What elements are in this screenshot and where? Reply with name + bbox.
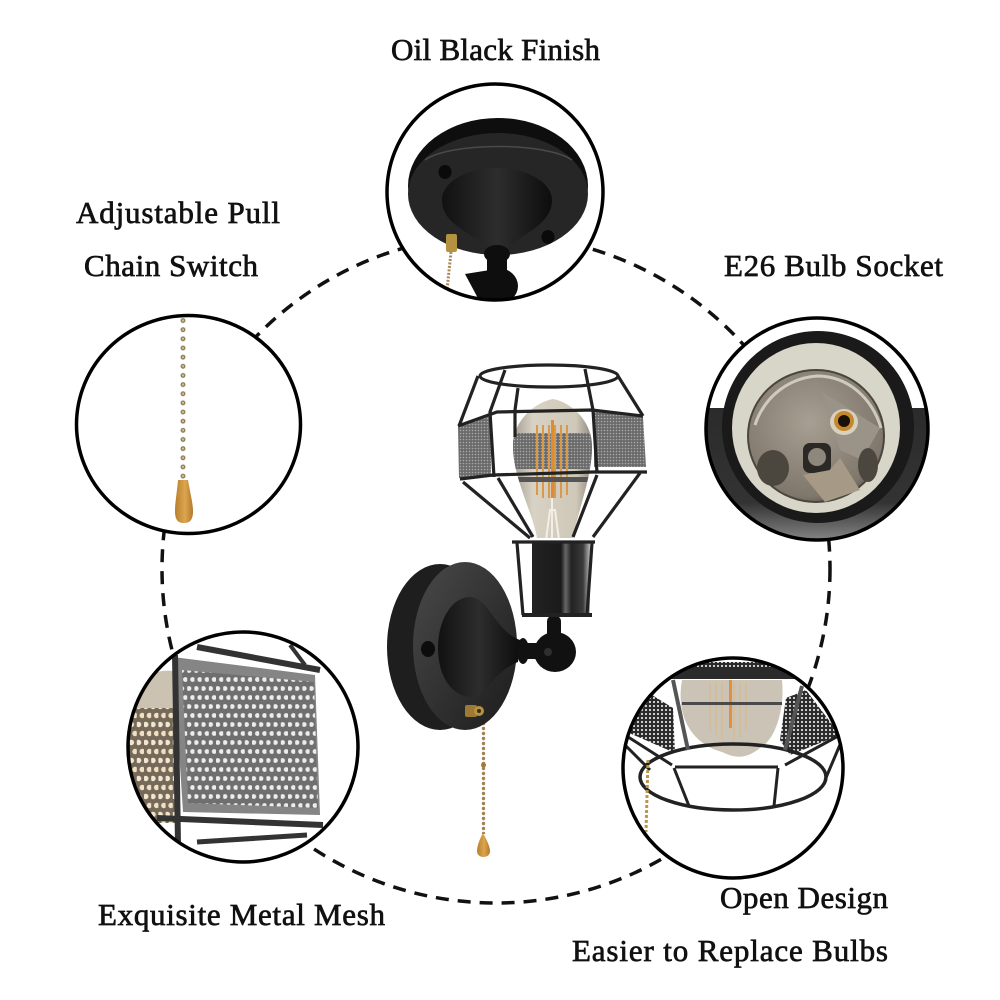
panel: oil black finish detail bbox=[387, 84, 603, 304]
label: oil black finish: Oil Black Finish bbox=[391, 32, 600, 67]
wooden pull drop bbox=[175, 480, 193, 523]
dashed connecting ring bbox=[162, 235, 830, 903]
panel: metal mesh detail bbox=[125, 632, 358, 862]
wire cage with mesh band bbox=[458, 365, 647, 615]
cone stem bbox=[442, 172, 552, 236]
bulb socket bbox=[532, 543, 590, 613]
swivel joint bbox=[517, 616, 576, 672]
label: adjustable pull chain switch: Chain Switch bbox=[84, 248, 258, 283]
right mesh bbox=[780, 690, 840, 755]
cone mount bbox=[438, 597, 520, 697]
label: adjustable pull chain switch bbox=[76, 195, 280, 283]
bead chain bbox=[180, 318, 186, 479]
label: open design easier to replace bulbs bbox=[572, 880, 888, 968]
left mesh panel bbox=[458, 416, 491, 478]
side screws bbox=[757, 450, 789, 486]
frame rods bbox=[157, 645, 323, 845]
panel: E26 socket detail bbox=[700, 318, 935, 543]
cage ring and bars bbox=[625, 680, 842, 810]
label: adjustable pull chain switch: Adjustable Pull bbox=[76, 195, 280, 230]
wall sconce lamp bbox=[387, 365, 647, 857]
exposed bulb bbox=[681, 680, 783, 757]
ceramic ring bbox=[732, 343, 900, 513]
label: exquisite metal mesh: Exquisite Metal Mesh bbox=[98, 897, 386, 932]
warm bulb behind mesh bbox=[130, 670, 175, 823]
ceiling plate bbox=[408, 118, 588, 255]
brass switch and chain bbox=[446, 234, 457, 290]
top band bbox=[670, 662, 795, 679]
centre screw bbox=[803, 443, 831, 473]
label: open design easier to replace bulbs: Open Design bbox=[720, 880, 888, 915]
label: open design easier to replace bulbs: Easier to Replace Bulbs bbox=[572, 933, 888, 968]
label: E26 bulb socket: E26 Bulb Socket bbox=[724, 248, 943, 283]
black collar bbox=[722, 331, 914, 523]
perforated panel bbox=[173, 657, 320, 815]
left mesh bbox=[630, 696, 675, 751]
metal interior bbox=[748, 370, 884, 502]
swivel knuckle bbox=[465, 245, 518, 304]
hanging chain bbox=[646, 760, 648, 832]
wall backplate bbox=[387, 562, 517, 730]
panel: pull chain detail bbox=[76, 316, 300, 534]
socket cylinder bbox=[700, 408, 935, 543]
brass contact bbox=[830, 409, 858, 435]
chain and pull drop bbox=[477, 716, 490, 857]
edison bulb bbox=[513, 399, 593, 540]
pull switch bbox=[465, 705, 484, 717]
panel: open design detail bbox=[623, 658, 843, 878]
right mesh panel bbox=[594, 411, 646, 467]
